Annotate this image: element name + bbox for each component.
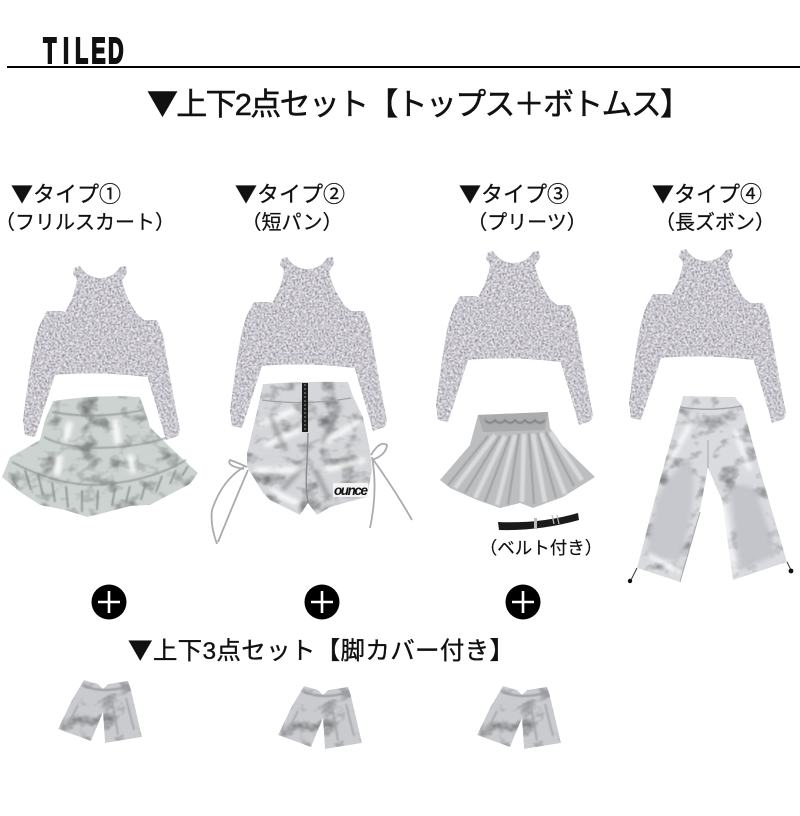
panel: type 3 pleated skirt xyxy=(436,177,602,558)
type 1 sequin top xyxy=(23,266,180,440)
type 3 sequin top xyxy=(436,251,593,425)
panel: type 4 long pants xyxy=(628,177,793,583)
zipper xyxy=(302,383,308,432)
title: 2-piece set: ▼上下2点セット【トップス＋ボトムス】 xyxy=(147,79,691,124)
type 4 label: ▼タイプ④ xyxy=(652,177,762,209)
plus icon 2 xyxy=(304,584,340,620)
shorts side laces xyxy=(212,444,412,544)
type 4 sequin top xyxy=(629,249,786,423)
leg cover 3 xyxy=(477,686,561,749)
panel: type 2 shorts xyxy=(212,177,412,544)
shorts label: ounce: ounce xyxy=(334,483,368,498)
drawstring toggles xyxy=(628,562,793,583)
type 4 metallic long pants xyxy=(628,396,793,583)
type 3 label: （プリーツ） xyxy=(467,211,587,234)
type 3 label xyxy=(459,177,587,234)
plus icon 3 xyxy=(506,584,540,620)
type 1 label: ▼タイプ① xyxy=(11,177,121,209)
type 1 label xyxy=(0,177,175,234)
belt note: （ベルト付き） xyxy=(480,538,602,558)
leg cover 2 xyxy=(278,686,362,749)
panel: type 1 frilled skirt xyxy=(0,177,198,517)
type 2 label xyxy=(235,177,345,234)
type 2 sequin top xyxy=(230,257,387,431)
type 1 frilled skirt xyxy=(2,396,198,517)
type 2 metallic shorts xyxy=(212,382,412,544)
type 4 label: （長ズボン） xyxy=(655,211,775,234)
type 3 pleated skirt xyxy=(440,412,595,508)
type 2 label: （短パン） xyxy=(242,211,342,234)
type 4 label xyxy=(652,177,775,234)
brand logo: TILED: TILED xyxy=(43,31,124,71)
belt xyxy=(498,513,579,530)
type 2 label: ▼タイプ② xyxy=(235,177,345,209)
leg cover 1 xyxy=(58,680,142,743)
type 3 label: ▼タイプ③ xyxy=(459,177,569,209)
heading: 3-piece set: ▼上下3点セット【脚カバー付き】 xyxy=(128,632,514,667)
plus icon 1 xyxy=(92,584,126,620)
type 1 label: （フリルスカート） xyxy=(0,211,175,234)
